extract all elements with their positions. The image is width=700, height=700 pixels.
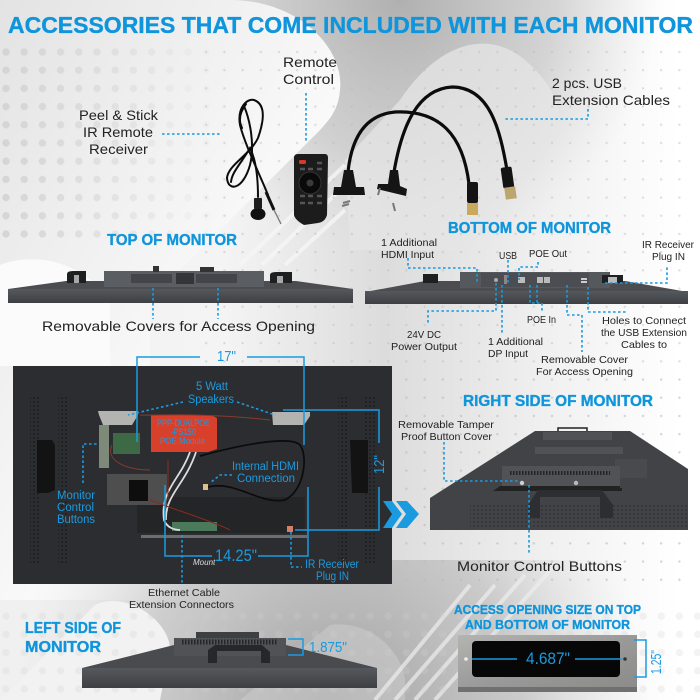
heading: right side: RIGHT SIDE OF MONITOR [463, 393, 653, 410]
dimension: 14.25 inch: 14.25" [215, 546, 257, 565]
wiring [163, 452, 196, 530]
arrows: removable covers [153, 288, 218, 319]
labels: bottom ports: POE In [527, 314, 556, 326]
heading: access opening [454, 602, 641, 632]
labels: bottom ports: 1 Additional [488, 336, 543, 348]
arrows: bottom ports [408, 258, 667, 352]
heading: top of monitor: TOP OF MONITOR [107, 232, 237, 249]
dimension: 17 inch [137, 348, 304, 445]
label: remote control: Remote [283, 54, 337, 70]
red POE module [151, 415, 217, 452]
labels: bottom ports: the USB Extension [601, 327, 687, 339]
labels: bottom ports: Cables to [621, 339, 667, 351]
label: remote control [283, 54, 337, 87]
icon: handles [37, 440, 368, 493]
labels: bottom ports: POE Out [529, 248, 567, 260]
labels: bottom ports: IR Receiver [642, 239, 694, 251]
labels: bottom ports: Removable Cover [541, 354, 629, 366]
dimension: 1.25 inch [634, 640, 665, 677]
title: ACCESSORIES THAT COME INCLUDED WITH EACH MONITOR [8, 12, 693, 38]
dimension: 12 inch [283, 410, 388, 530]
heading: access opening: AND BOTTOM OF MONITOR [465, 617, 631, 632]
arrow: IR receiver [162, 133, 221, 135]
labels: interior callouts: Plug IN [316, 571, 349, 583]
panel: monitor back interior [13, 366, 392, 584]
dimension: 17 inch: 17" [217, 348, 236, 365]
labels: interior callouts: Connection [237, 473, 295, 485]
heading: left side [25, 620, 121, 656]
icon: USB extension cables [333, 87, 517, 215]
dimension: 12 inch: 12" [371, 455, 388, 474]
label: USB cables: 2 pcs. USB [552, 75, 622, 91]
monitor: top view [8, 266, 353, 303]
label: ethernet connectors: Ethernet Cable [148, 587, 220, 599]
monitor: left side view [82, 632, 377, 688]
labels: interior callouts: Internal HDMI [232, 461, 299, 473]
labels: interior callouts: Buttons [57, 514, 95, 526]
label: IR remote receiver: Receiver [89, 141, 148, 157]
label: removable covers: Removable Covers for Access Opening [42, 318, 315, 334]
label: ethernet connectors [129, 587, 234, 611]
arrows: interior callouts [83, 402, 302, 583]
label: tamper proof cover: Proof Button Cover [401, 431, 493, 443]
labels: interior callouts: PPP-DUALPOE [157, 418, 210, 428]
heading: bottom of monitor: BOTTOM OF MONITOR [448, 220, 611, 237]
arrow: remote control [305, 93, 307, 142]
labels: bottom ports: USB [499, 250, 517, 262]
photo: access opening plate [458, 635, 637, 692]
dimension: 14.25 inch [165, 485, 308, 565]
label: tamper proof cover [398, 419, 495, 443]
arrow: USB cables [503, 109, 588, 119]
labels: bottom ports: For Access Opening [536, 366, 633, 378]
labels: interior callouts: Monitor [57, 490, 95, 502]
labels: bottom ports: HDMI Input [381, 249, 434, 261]
heading: left side: MONITOR [25, 639, 101, 656]
labels: bottom ports: 24V DC [407, 329, 441, 341]
dimension: 4.687 inch: 4.687" [526, 649, 570, 668]
label: USB cables: Extension Cables [552, 92, 670, 108]
labels: interior callouts: -PS150 [171, 427, 196, 437]
labels: bottom ports: DP Input [488, 348, 528, 360]
label: IR remote receiver: Peel & Stick [79, 107, 159, 123]
boards [99, 425, 109, 468]
speakers [98, 411, 310, 425]
icon: remote [294, 154, 328, 225]
label: remote control: Control [283, 71, 334, 87]
labels: bottom ports: Plug IN [652, 251, 685, 263]
labels: interior callouts: POE Module [160, 436, 205, 446]
dimension: 1.25 inch: 1.25" [648, 650, 665, 674]
label: USB cables [552, 75, 670, 108]
label: ethernet connectors: Extension Connectors [129, 599, 234, 611]
label: IR remote receiver: IR Remote [83, 124, 153, 140]
labels: bottom ports: Holes to Connect [602, 315, 686, 327]
labels: interior callouts: Control [57, 502, 94, 514]
dimension: 1.875 inch [288, 639, 347, 656]
icon: chevron arrow [383, 501, 419, 528]
labels: bottom ports: Power Output [391, 341, 457, 353]
labels: bottom ports: 1 Additional [381, 237, 437, 249]
monitor: bottom view [365, 272, 688, 304]
labels: bottom ports [381, 237, 694, 378]
label: IR remote receiver [79, 107, 159, 157]
labels: interior callouts: IR Receiver [305, 559, 359, 571]
labels: interior callouts: Speakers [188, 394, 234, 406]
monitor: right side view [430, 428, 688, 530]
icon: IR receiver cable [227, 100, 281, 224]
label: tamper proof cover: Removable Tamper [398, 419, 495, 431]
dimension: 1.875 inch: 1.875" [309, 639, 347, 656]
label: monitor control buttons: Monitor Control Buttons [457, 558, 622, 574]
arrow: button callouts [444, 442, 529, 555]
heading: left side: LEFT SIDE OF [25, 620, 121, 637]
heading: access opening: ACCESS OPENING SIZE ON TOP [454, 602, 641, 617]
labels: interior callouts [57, 381, 359, 583]
labels: interior callouts: 5 Watt [196, 381, 229, 393]
panel: monitor back interior: Mount [193, 558, 216, 567]
